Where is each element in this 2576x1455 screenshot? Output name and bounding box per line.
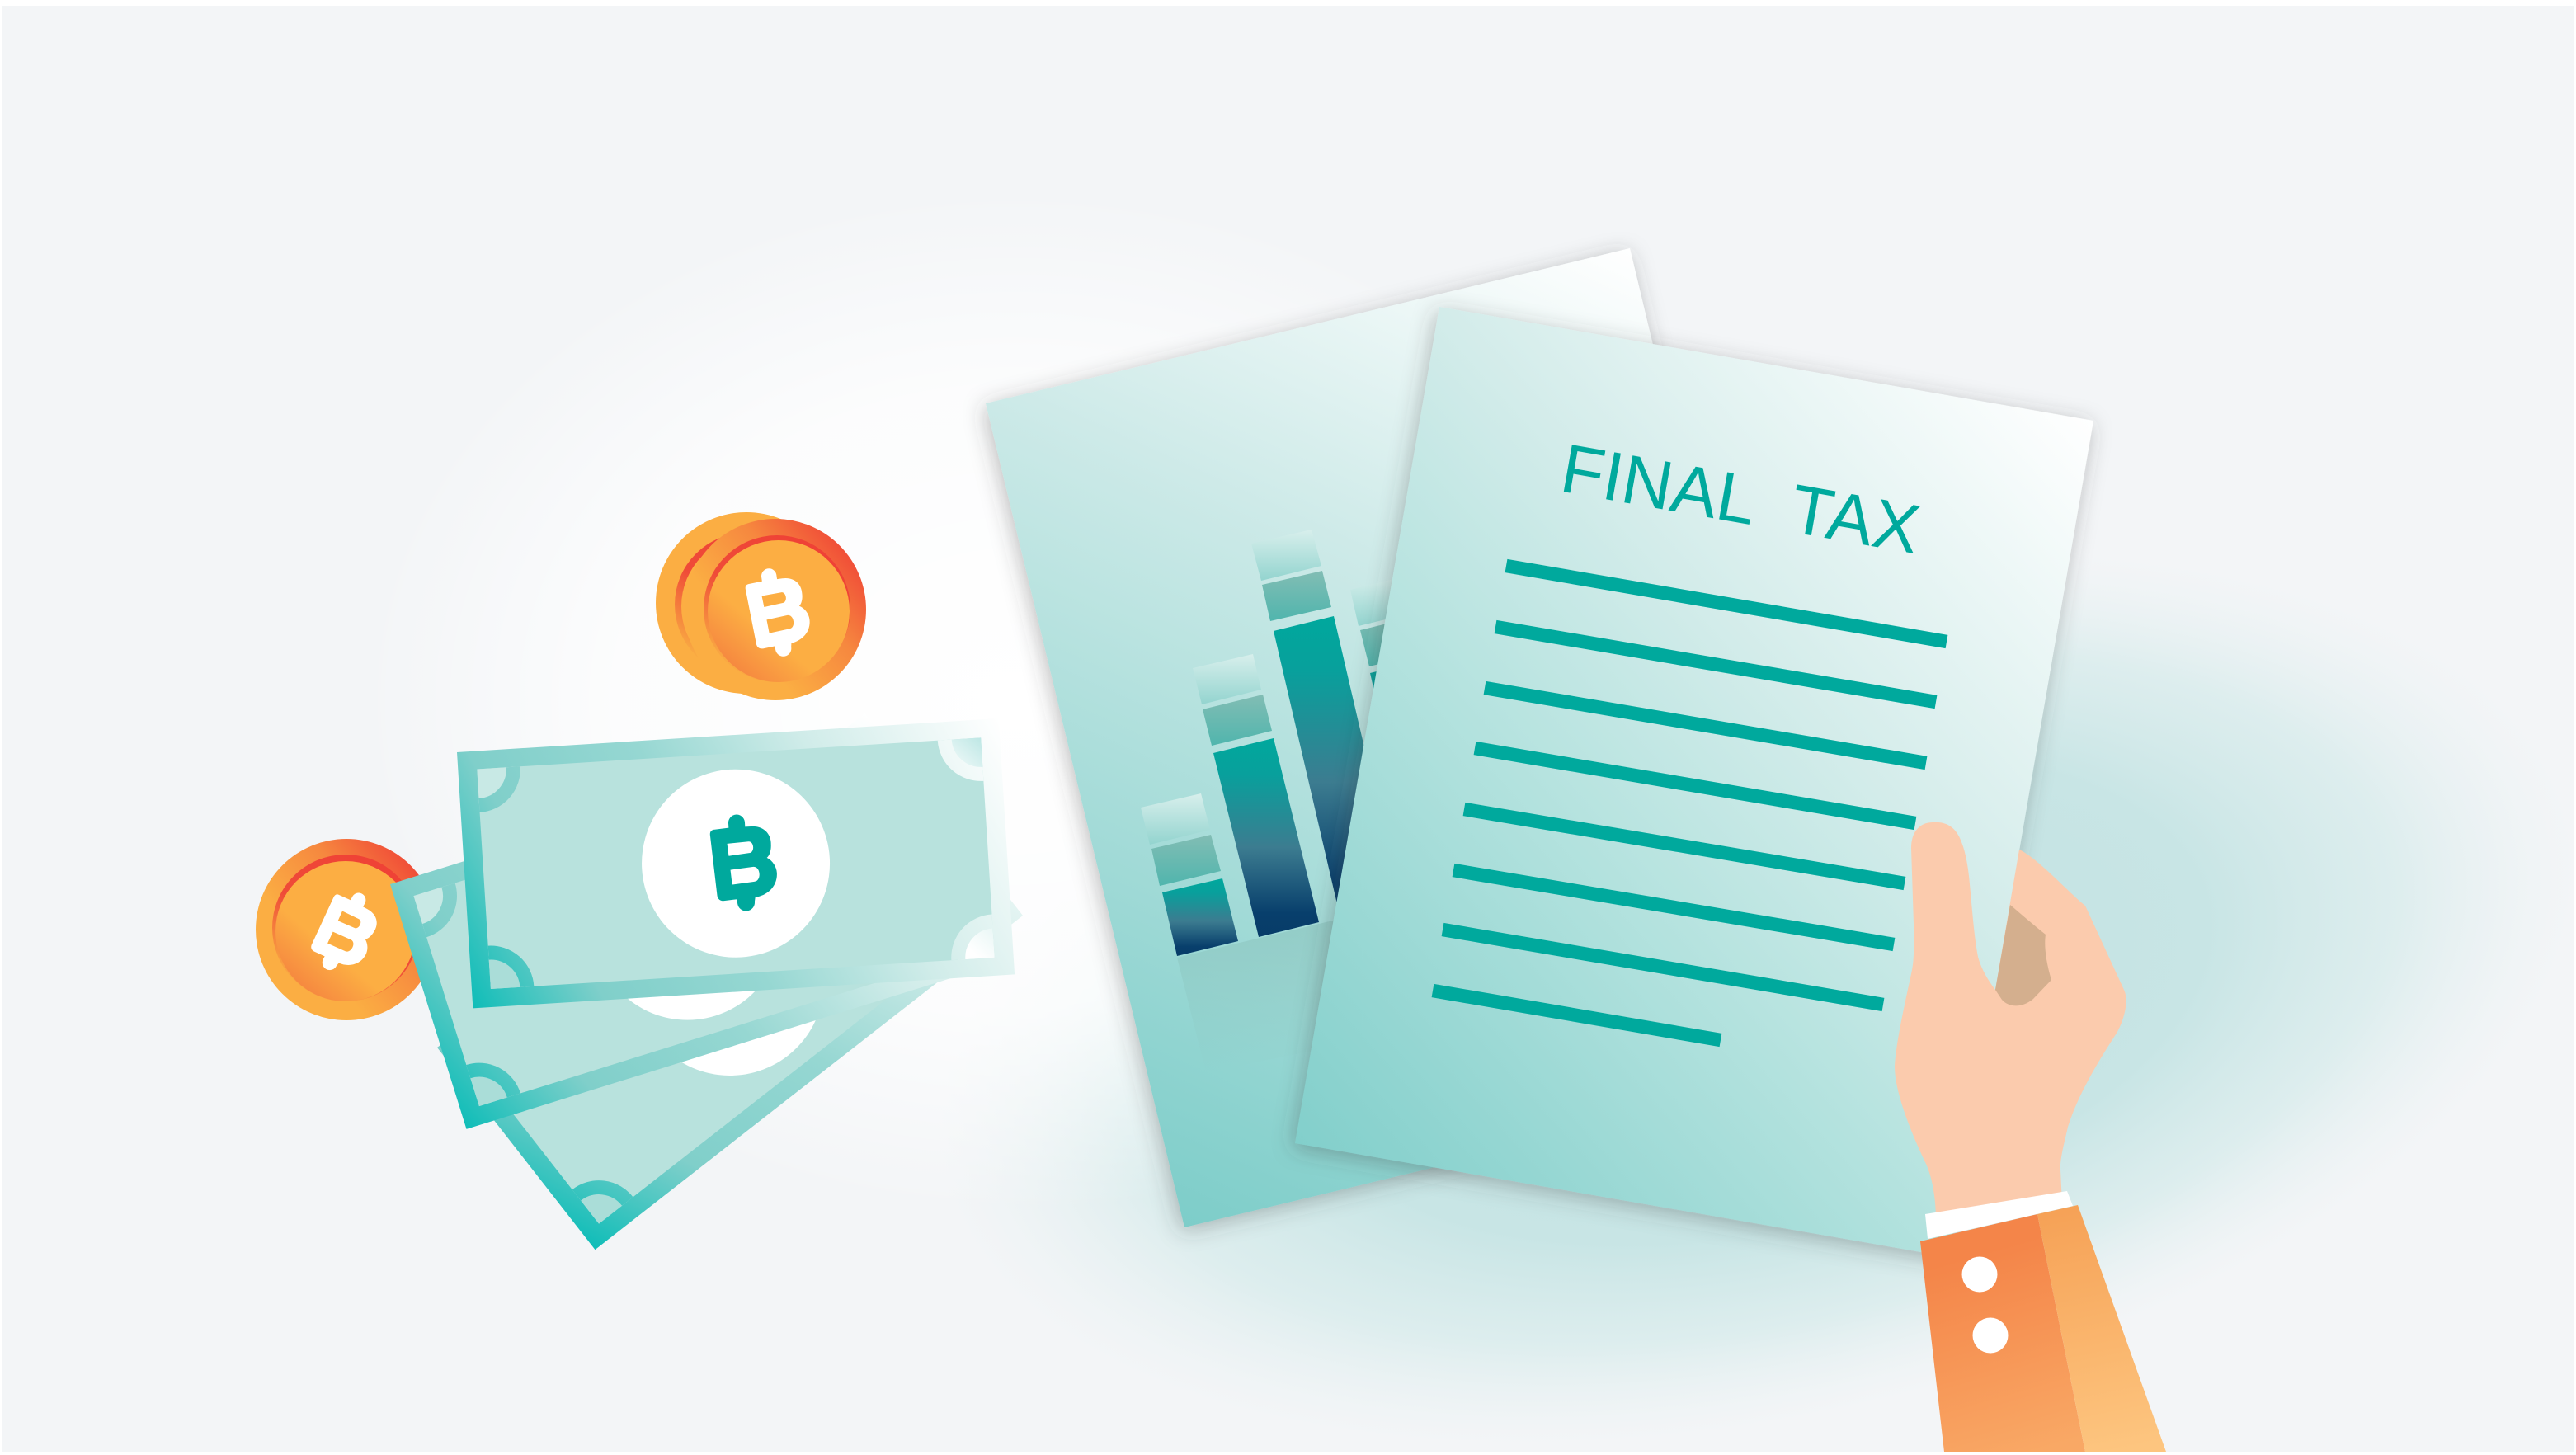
front paper sheet — [1295, 307, 2093, 1257]
icon: bitcoin symbol — [709, 812, 779, 913]
form text lines — [1433, 566, 1947, 1040]
sleeve buttons — [1961, 1257, 2008, 1353]
icon: bitcoin symbol — [302, 883, 390, 982]
hand holding paper — [1895, 822, 2166, 1452]
title: TAX — [1785, 469, 1926, 568]
back paper sheet — [986, 248, 1827, 1227]
bar 4 — [1350, 575, 1468, 840]
coin: top pair — [656, 512, 866, 700]
soft teal glow — [1045, 606, 2484, 1394]
skin — [1895, 822, 2126, 1221]
bar 3 — [1251, 530, 1401, 918]
banknote: middle — [390, 861, 950, 1129]
bar 2 — [1193, 654, 1319, 937]
finger shadow — [1995, 905, 2051, 1005]
back coin — [656, 512, 837, 694]
icon: bitcoin symbol — [743, 564, 814, 661]
banknote: bottom — [437, 899, 1023, 1250]
chart base shade — [1177, 904, 1452, 1072]
front paper: final tax form — [1295, 307, 2093, 1257]
sleeve side — [2037, 1205, 2166, 1452]
sleeve main — [1920, 1214, 2085, 1452]
title: FINAL — [1556, 429, 1763, 539]
shirt cuff — [1925, 1191, 2073, 1239]
bar 1 — [1141, 793, 1238, 956]
front coin — [685, 519, 866, 700]
coin: left — [256, 839, 437, 1020]
banknote: top — [457, 721, 1015, 1008]
back paper with bar chart — [986, 248, 1827, 1227]
bar chart — [1141, 530, 1468, 956]
soft white glow — [609, 383, 1160, 1137]
